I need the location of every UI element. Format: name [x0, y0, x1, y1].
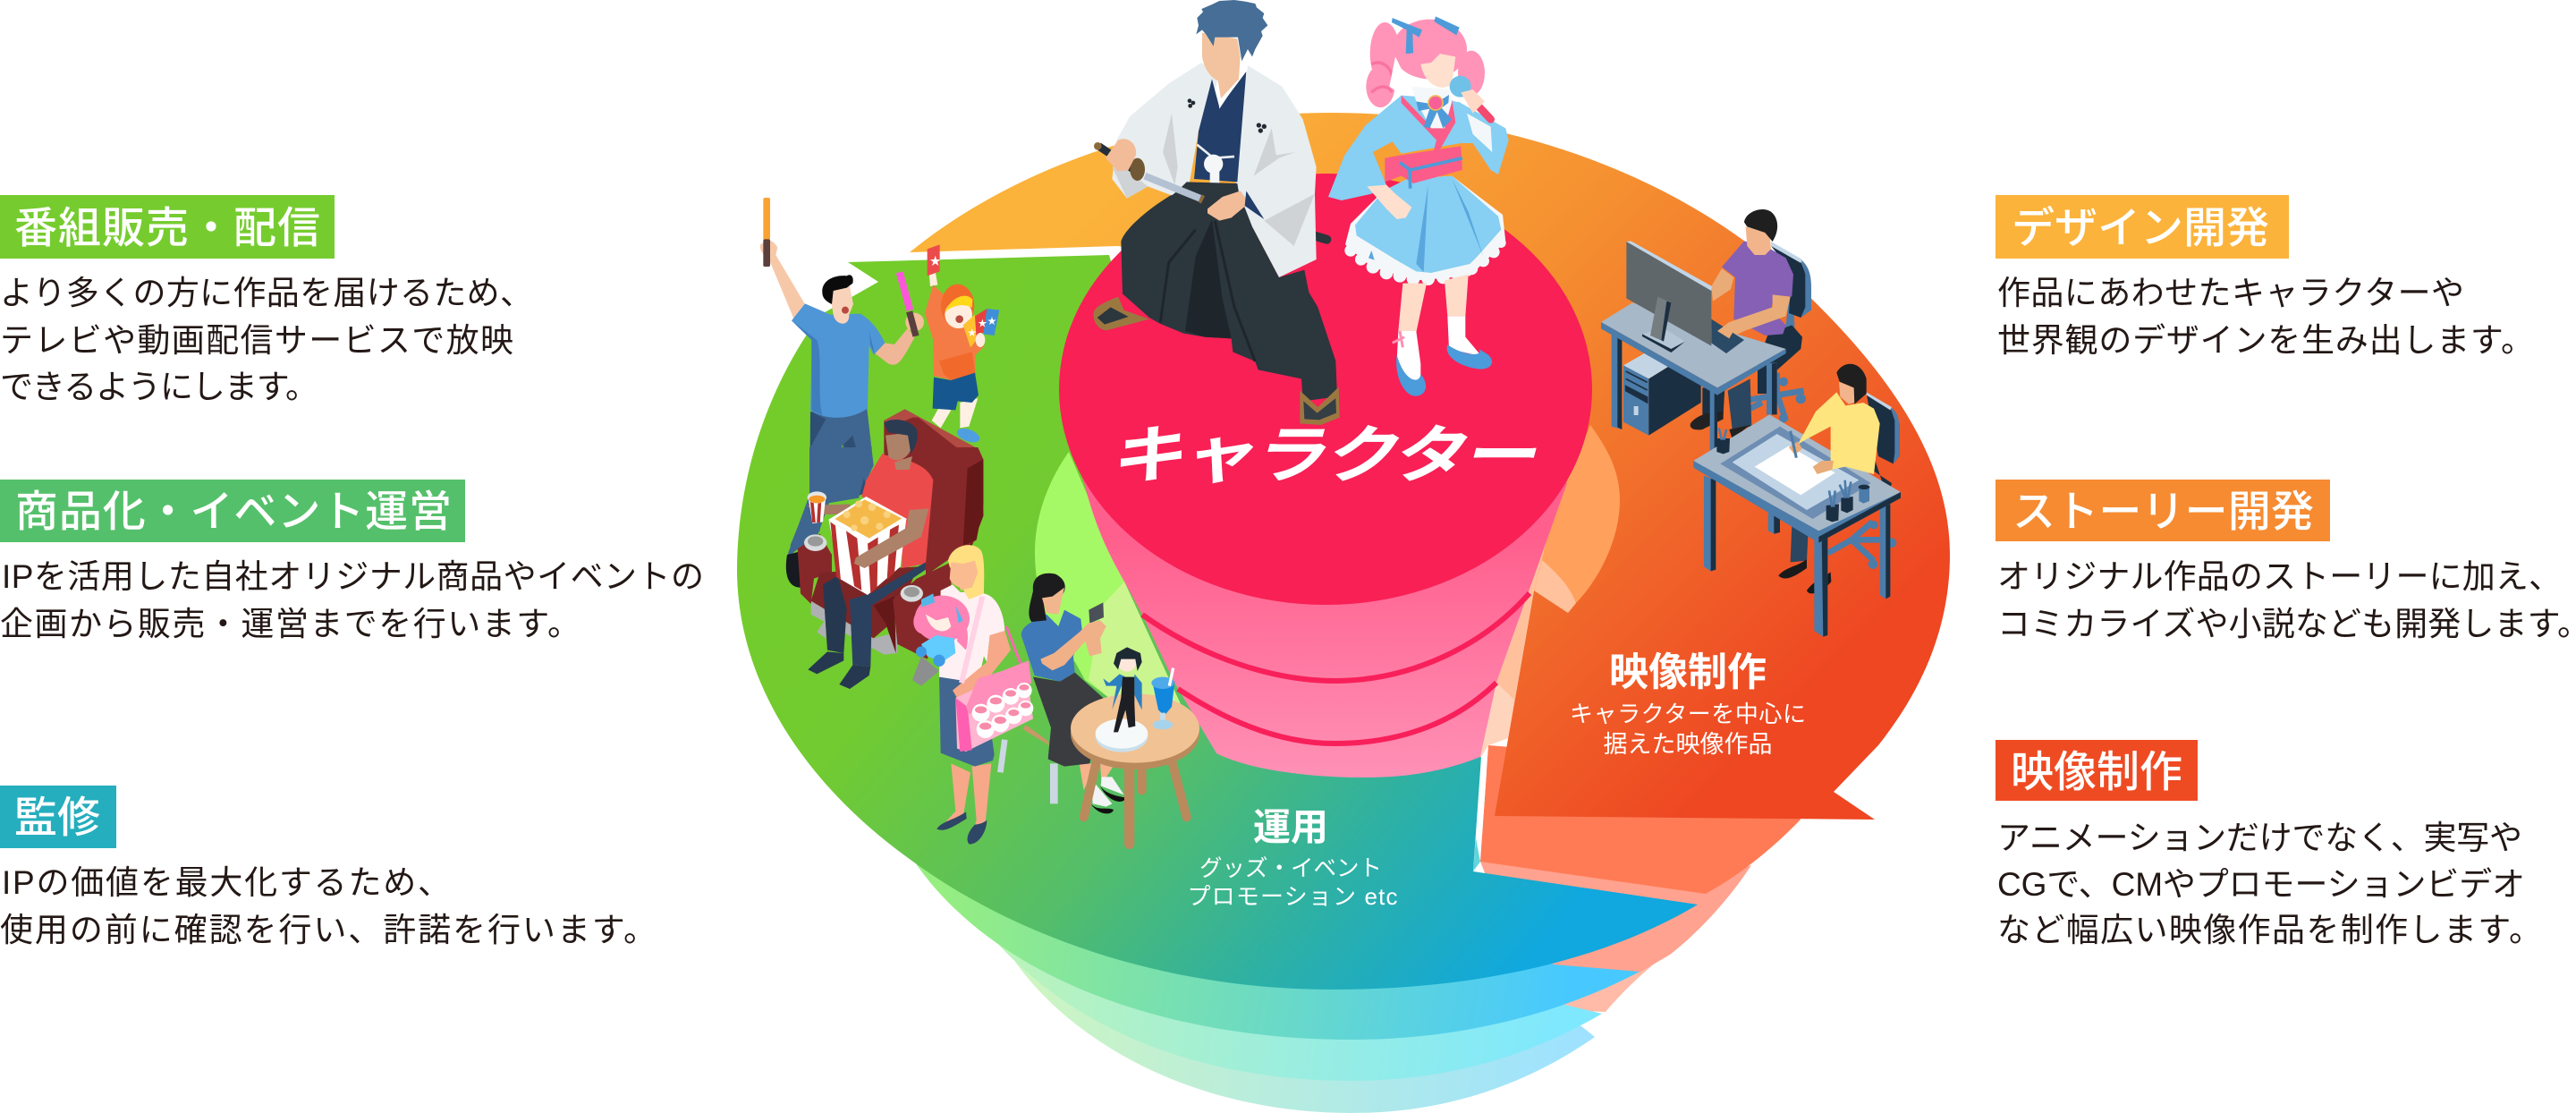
text: supervision: [0, 864, 657, 948]
idol character: [1328, 16, 1509, 396]
heading: 映像制作: 映像制作: [2011, 749, 2182, 796]
pink column: [1078, 465, 1567, 777]
salmon layer 4: [1521, 930, 1670, 1012]
label: 運用: プロモーション etc: [1188, 883, 1397, 910]
label: 映像制作: [1570, 650, 1806, 758]
text: broadcasting: テレビや動画配信サービスで放映: [0, 322, 513, 359]
text: story: コミカライズや小説なども開発します。: [1997, 606, 2576, 642]
panel: right descriptions: [1996, 195, 2576, 948]
green segment: operations: [737, 255, 1698, 990]
orange layer 2: [1480, 745, 1801, 894]
heading: 映像制作: [1996, 740, 2198, 801]
designer at computer: [1601, 209, 1811, 450]
heading: ストーリー開発: ストーリー開発: [2012, 489, 2314, 536]
salmon layer 3: [1480, 862, 1751, 973]
designer at drawing tablet: [1693, 364, 1901, 637]
pale green wedge: [1089, 582, 1181, 704]
label: 運用: 運用: [1253, 806, 1328, 848]
child with cards: [925, 244, 999, 445]
text: broadcasting: [0, 275, 533, 405]
woman with plush and bag: [913, 545, 1033, 844]
text: merchandising: [0, 558, 704, 642]
peach strip: [1480, 537, 1547, 758]
seated woman with phone: [1000, 573, 1125, 813]
illustration: characters on disc: [1094, 0, 1509, 425]
label: 映像制作: 映像制作: [1609, 650, 1767, 694]
heading: 商品化・イベント運営: 商品化・イベント運営: [15, 489, 452, 536]
pink band lines: [1142, 593, 1530, 743]
text: broadcasting: できるようにします。: [0, 369, 318, 405]
peach wedge: [1534, 425, 1620, 613]
white gap: [1476, 767, 1487, 838]
child with cards: ★: [978, 319, 987, 329]
child with cards: ★: [929, 255, 941, 268]
child with cards: ★: [987, 318, 996, 327]
illustration: fans: [760, 198, 999, 546]
text: supervision: 使用の前に確認を行い、許諾を行います。: [0, 912, 657, 948]
disc layer 3: [982, 850, 1602, 1081]
disc layer 4: [1010, 895, 1595, 1113]
heading: 監修: [0, 786, 116, 848]
heading: デザイン開発: デザイン開発: [2012, 205, 2269, 252]
label: 運用: [1188, 806, 1397, 910]
text: design: 世界観のデザインを生み出します。: [1997, 322, 2534, 359]
text: merchandising: IPを活用した自社オリジナル商品やイベントの: [2, 558, 704, 595]
heading: 番組販売・配信: 番組販売・配信: [14, 205, 320, 252]
text: story: オリジナル作品のストーリーに加え、: [1997, 558, 2562, 595]
black bag under seat: [912, 656, 939, 686]
text: merchandising: 企画から販売・運営までを行います。: [0, 606, 580, 642]
heading: ストーリー開発: [1996, 480, 2330, 541]
cyan strip: [1473, 838, 1480, 871]
chart: layered spiral disc: [737, 113, 1950, 1113]
child with cards: ★: [968, 329, 977, 339]
orange segment: video: [910, 113, 1950, 820]
red character disc: [1059, 174, 1592, 605]
light green wedge: [1035, 452, 1181, 704]
label: 映像制作: 据えた映像作品: [1603, 731, 1773, 758]
cinema seat and popcorn man: [786, 420, 983, 689]
illustration: seated and standing fans: [786, 420, 1199, 844]
text: video: CGで、CMやプロモーションビデオ: [1997, 866, 2525, 903]
text: video: アニメーションだけでなく、実写や: [1997, 820, 2522, 856]
text: broadcasting: より多くの方に作品を届けるため、: [0, 275, 533, 311]
disc layer 2: [907, 805, 1640, 1040]
text: video: [1997, 820, 2542, 948]
heading: 監修: 監修: [14, 794, 100, 842]
illustration: designers: [1601, 209, 1901, 637]
text: story: [1997, 558, 2576, 642]
cinema seat back: [884, 409, 983, 546]
text: video: など幅広い映像作品を制作します。: [1997, 912, 2542, 948]
text: design: 作品にあわせたキャラクターや: [1997, 275, 2464, 311]
label: 映像制作: キャラクターを中心に: [1570, 701, 1806, 727]
title: キャラクター: キャラクター: [1106, 421, 1550, 490]
panel: left descriptions: [0, 195, 704, 948]
cheering man: [760, 198, 924, 546]
text: design: [1997, 275, 2534, 359]
table with figure and drink: [1071, 647, 1199, 844]
heading: デザイン開発: [1996, 195, 2289, 259]
samurai character: [1094, 0, 1340, 425]
label: 運用: グッズ・イベント: [1199, 856, 1382, 881]
text: supervision: IPの価値を最大化するため、: [2, 864, 451, 901]
light peach wedge: [1534, 560, 1576, 613]
heading: 番組販売・配信: [0, 195, 335, 259]
pale peach strip: [1480, 683, 1514, 758]
